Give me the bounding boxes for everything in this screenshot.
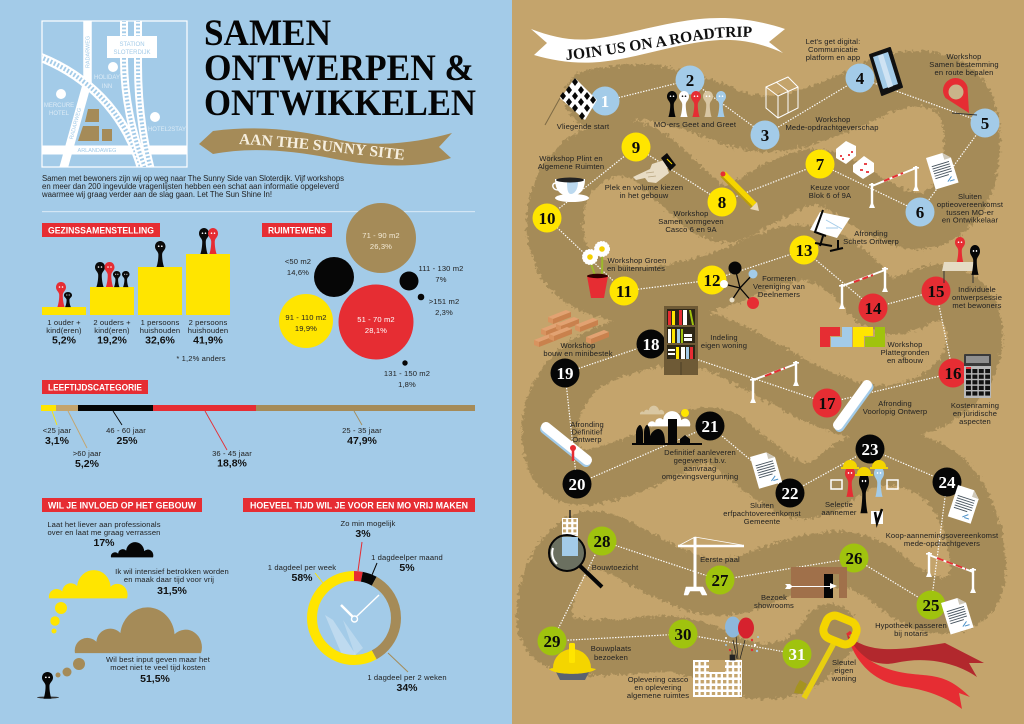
heading: ruimtewens <box>262 223 332 237</box>
route labels: Bouwplaats <box>591 644 631 653</box>
clouds: influence chart: en maak daar tijd voor vrij <box>124 575 214 584</box>
icon: workers with hard hats <box>831 460 898 524</box>
bubble chart: room sizes: 131 - 150 m2 <box>384 369 430 378</box>
banner: join us on a roadtrip <box>531 18 785 63</box>
map of Sloterdijk area: INN <box>102 84 112 90</box>
route labels: Afronding <box>854 229 888 238</box>
route stops 25 to 31: green: 31 <box>788 645 806 664</box>
icon: pawns <box>667 91 726 117</box>
bar chart: household composition: 5,2% <box>52 334 77 346</box>
route stops 25 to 31: green: 28 <box>594 532 610 551</box>
icon: bricks <box>534 310 609 347</box>
map of Sloterdijk area: STATION <box>119 42 145 48</box>
icon: hard hat <box>549 643 596 680</box>
route labels: Let's get digital: <box>806 37 860 46</box>
route labels: aannemer <box>821 508 857 517</box>
intro text: waarmee wij graag verder aan de slag gaan. Let The Sun Shine In! <box>41 190 272 199</box>
title <box>204 13 476 124</box>
route labels: Sluiten <box>750 501 774 510</box>
route stops 7 to 13: yellow: 13 <box>796 241 812 260</box>
icon: contract 24 <box>948 485 981 524</box>
bar chart: household composition: kind(eren) <box>46 326 82 335</box>
route stops 14 to 17: red: 17 <box>818 394 836 413</box>
route stops 18 to 24: black: 22 <box>782 484 798 503</box>
route labels: erfpachtovereenkomst <box>723 509 802 518</box>
icon: key with red ribbons <box>794 613 984 709</box>
route stops 25 to 31: green: 30 <box>674 625 692 644</box>
route labels: platform en app <box>806 53 860 62</box>
route labels: Bouwtoezicht <box>592 563 639 572</box>
route stops 14 to 17: red: 15 <box>928 282 944 301</box>
route labels: in het gebouw <box>620 191 669 200</box>
icon: coffee cup <box>553 178 589 202</box>
icon: wire house <box>766 77 798 118</box>
stacked bar: age categories <box>41 405 475 470</box>
bubble chart: room sizes: 14,6% <box>287 268 309 277</box>
ribbon: aan the sunny site: AAN THE SUNNY SITE <box>239 134 404 160</box>
route labels: omgevingsvergunning <box>662 472 738 481</box>
route labels: Gemeente <box>744 517 780 526</box>
route stops 7 to 13: yellow: 12 <box>704 271 720 290</box>
clouds: influence chart: 31,5% <box>157 585 188 597</box>
stacked bar: age categories: 25% <box>116 435 138 447</box>
route stops 18 to 24: black: 21 <box>702 417 718 436</box>
bubble chart: room sizes: <50 m2 <box>285 257 311 266</box>
map of Sloterdijk area: ARLANDAWEG <box>78 148 116 154</box>
route stops 1 to 6: blue: 2 <box>686 71 694 90</box>
route labels: ontwerpsessie <box>952 293 1002 302</box>
route stops 18 to 24: black: 24 <box>938 473 956 492</box>
stacked bar: age categories: 47,9% <box>347 435 378 447</box>
route labels: en buitenruimtes <box>607 264 665 273</box>
clouds: influence chart <box>37 520 229 699</box>
banner: join us on a roadtrip: JOIN US ON A ROADTRIP <box>566 26 752 60</box>
stacked bar: age categories: 3,1% <box>45 435 70 447</box>
icon: dice <box>836 141 874 179</box>
route stops 7 to 13: yellow <box>532 132 834 306</box>
bar chart: household composition: 32,6% <box>145 334 176 346</box>
map of Sloterdijk area: MERCURE <box>44 103 74 109</box>
route labels: optieovereenkomst <box>937 200 1004 209</box>
route labels: Blok 6 of 9A <box>809 191 852 200</box>
route stops 25 to 31: green: 25 <box>922 596 940 615</box>
route labels: Bezoek <box>761 593 787 602</box>
route labels: en afbouw <box>887 356 923 365</box>
route stops 18 to 24: black: 18 <box>642 335 660 354</box>
route labels: gegevens t.b.v. <box>674 456 726 465</box>
icon: table with pawns <box>942 237 980 283</box>
route stops 1 to 6: blue: 4 <box>856 69 865 88</box>
route labels: Casco 6 en 9A <box>665 225 717 234</box>
icon: magnifier on building <box>549 510 602 587</box>
bubble chart: room sizes <box>279 203 464 389</box>
icon: contract 6 <box>926 151 959 190</box>
route stops 25 to 31: green: 27 <box>712 571 729 590</box>
route labels: Plattegronden <box>881 348 929 357</box>
route labels: Kostenraming <box>951 401 999 410</box>
icon: checkered flag <box>545 78 597 125</box>
route labels: en route bepalen <box>935 68 993 77</box>
bar chart: household composition: huishouden <box>188 326 228 335</box>
clock donut chart: time <box>268 519 447 694</box>
clock donut chart: time: Zo min mogelijk <box>341 519 396 528</box>
route labels: Oplevering casco <box>628 675 688 684</box>
icon: crane <box>678 537 744 595</box>
clouds: influence chart: moet niet te veel tijd kosten <box>110 663 206 672</box>
route labels: Workshop <box>815 115 851 124</box>
map of Sloterdijk area: HOTEL <box>49 111 70 117</box>
route labels: tussen MO-er <box>946 208 994 217</box>
clouds: influence chart: 17% <box>93 537 115 549</box>
route labels: MO-ers Geet and Greet <box>654 120 737 129</box>
map of Sloterdijk area <box>40 20 190 170</box>
bar chart: household composition: huishouden <box>140 326 180 335</box>
route labels: Samen bestemming <box>929 60 999 69</box>
route labels: Sleutel <box>832 658 856 667</box>
route labels: Vereniging van <box>753 282 805 291</box>
clock donut chart: time: 1 dagdeel per 2 weken <box>367 673 447 682</box>
route labels: Formeren <box>762 274 796 283</box>
route labels: Deelnemers <box>758 290 800 299</box>
route labels: Plek en volume kiezen <box>605 183 683 192</box>
map of Sloterdijk area: HOTEL2STAY <box>148 127 186 133</box>
route labels: eigen <box>834 666 854 675</box>
icon: gate 3 <box>750 361 799 403</box>
route stops 7 to 13: yellow: 7 <box>816 155 825 174</box>
icon: flowers in pot <box>582 242 610 298</box>
bar chart: household composition: 19,2% <box>97 334 128 346</box>
icon: showroom door <box>785 567 847 598</box>
clouds: influence chart: Ik wil intensief betrokken worden <box>115 567 229 576</box>
intro text: Samen met bewoners zijn wij op weg naar The Sunny Side van Sloterdijk. Vijf workshops <box>42 174 344 183</box>
bubble chart: room sizes: 28,1% <box>365 326 387 335</box>
route stops 1 to 6: blue: 1 <box>601 92 609 111</box>
route stops 18 to 24: black: 20 <box>568 475 586 494</box>
winding road <box>544 79 978 671</box>
route stops 18 to 24: black <box>550 330 962 508</box>
heading: hoeveel tijd: HOEVEEL TIJD WIL JE VOOR EEN MO VRIJ MAKEN <box>250 500 468 510</box>
stacked bar: age categories: >60 jaar <box>73 449 102 458</box>
route labels: Schets Ontwerp <box>843 237 899 246</box>
left panel background <box>0 0 512 724</box>
route labels <box>538 37 1004 700</box>
icon: skyline <box>632 406 702 445</box>
icon: network nodes <box>720 262 759 309</box>
route stops 1 to 6: blue: 5 <box>981 114 989 133</box>
icon: scroll 20 with seal <box>545 427 587 462</box>
map of Sloterdijk area: RADARWEG <box>69 107 83 140</box>
route labels: Selectie <box>825 500 853 509</box>
icon: pointing hand <box>633 153 676 183</box>
bar chart: household composition: 2 persoons <box>189 318 227 327</box>
route labels: met bewoners <box>952 301 1002 310</box>
route labels: Eerste paal <box>700 555 740 564</box>
route labels: Individuele <box>958 285 996 294</box>
ribbon: aan the sunny site <box>199 128 452 166</box>
heading: gezinssamenstelling <box>42 223 160 237</box>
bar chart: household composition: 2 ouders + <box>93 318 131 327</box>
stacked bar: age categories: 5,2% <box>75 458 100 470</box>
route labels: showrooms <box>754 601 794 610</box>
icon: gate 1 <box>869 166 919 208</box>
bubble chart: room sizes: 2,3% <box>435 308 453 317</box>
icon: contract 25 <box>941 596 974 635</box>
icon: scroll 17 <box>838 385 868 427</box>
route labels: en oplevering <box>634 683 682 692</box>
title: ONTWIKKELEN <box>204 83 476 124</box>
route labels: bezoeken <box>594 653 628 662</box>
route stops 1 to 6: blue: 3 <box>761 126 769 145</box>
icon: balloons and building <box>693 616 759 697</box>
route stops 1 to 6: blue <box>590 64 1000 226</box>
stacked bar: age categories: 25 - 35 jaar <box>342 426 382 435</box>
route stops 18 to 24: black: 23 <box>862 440 878 459</box>
route labels: Workshop Plint en <box>539 154 603 163</box>
map of Sloterdijk area: HOLIDAY <box>94 75 120 81</box>
stacked bar: age categories: <25 jaar <box>43 426 72 435</box>
bubble chart: room sizes: >151 m2 <box>429 297 459 306</box>
icon: location pin <box>943 78 977 115</box>
route stops 7 to 13: yellow: 9 <box>632 138 640 157</box>
icon: gate 4 <box>926 552 976 593</box>
clouds: influence chart: Wil best input geven maar het <box>106 655 211 664</box>
route labels: Koop-aannemingsovereenkomst <box>886 531 999 540</box>
route labels: Workshop Groen <box>608 256 666 265</box>
route stops 7 to 13: yellow: 8 <box>718 193 726 212</box>
route labels: en Ontwikkelaar <box>942 216 998 224</box>
route labels: Sluiten <box>958 192 982 201</box>
route labels: Afronding <box>570 420 604 429</box>
heading: leeftijdscategorie: LEEFTIJDSCATEGORIE <box>48 382 142 392</box>
route stops 7 to 13: yellow: 11 <box>616 282 632 301</box>
bar chart: household composition: * 1,2% anders <box>176 354 226 363</box>
route stops 14 to 17: red <box>812 276 968 418</box>
bubble chart: room sizes: 71 - 90 m2 <box>362 231 400 240</box>
heading: wil je invloed: WIL JE INVLOED OP HET GEBOUW <box>48 500 196 510</box>
icon: floor plan blocks <box>820 327 885 347</box>
route labels: woning <box>831 674 856 683</box>
heading: gezinssamenstelling: GEZINSSAMENSTELLING <box>48 226 154 236</box>
icon: calculator <box>964 354 991 398</box>
route labels: Algemene Ruimten <box>538 162 604 171</box>
heading: hoeveel tijd <box>243 498 475 512</box>
route labels: eigen woning <box>701 341 747 350</box>
stacked bar: age categories: 18,8% <box>217 458 248 470</box>
route labels: Workshop <box>946 52 982 61</box>
intro text <box>41 174 344 199</box>
clouds: influence chart: 51,5% <box>140 673 171 685</box>
route labels: Communicatie <box>808 45 858 54</box>
clock donut chart: time: 1 dagdeel per week <box>268 563 336 572</box>
bar chart: household composition <box>42 228 230 363</box>
bubble chart: room sizes: 91 - 110 m2 <box>285 313 327 322</box>
bubble chart: room sizes: 51 - 70 m2 <box>357 315 395 324</box>
icon: contract 22 <box>750 450 782 489</box>
route stops 14 to 17: red: 14 <box>864 299 882 318</box>
route labels: bouw en minibestek <box>543 349 613 358</box>
icon: pencil <box>720 172 759 211</box>
route stops 25 to 31: green: 26 <box>846 549 862 568</box>
clouds: influence chart: Laat het liever aan professionals <box>47 520 161 529</box>
route stops 7 to 13: yellow: 10 <box>538 209 556 228</box>
route labels: en juridische <box>953 409 997 418</box>
route labels: Workshop <box>887 340 923 349</box>
route labels: mede-opdrachtgevers <box>904 539 980 548</box>
map of Sloterdijk area: SLOTERDIJK <box>113 50 151 56</box>
icon: drawing board <box>810 210 850 251</box>
route labels: aspecten <box>959 417 991 426</box>
bar chart: household composition: 1 ouder + <box>47 318 81 327</box>
route labels: Workshop <box>673 209 709 218</box>
icon: bookshelf <box>664 306 698 375</box>
right panel background <box>512 0 1024 724</box>
clouds: influence chart: over en laat me graag verrassen <box>47 528 161 537</box>
route labels: Vliegende start <box>557 122 610 131</box>
bubble chart: room sizes: 26,3% <box>370 242 392 251</box>
bubble chart: room sizes: 19,9% <box>295 324 317 333</box>
route labels: Workshop <box>560 341 596 350</box>
dotted route line <box>547 78 985 654</box>
route labels: algemene ruimtes <box>627 691 689 700</box>
stacked bar: age categories: 46 - 60 jaar <box>106 426 146 435</box>
route stops 25 to 31: green: 29 <box>544 632 560 651</box>
bubble chart: room sizes: 7% <box>435 275 447 284</box>
route labels: Definitief <box>572 428 603 436</box>
route labels: Hypotheek passeren <box>875 621 947 630</box>
clock donut chart: time: 58% <box>291 572 313 584</box>
route stops 18 to 24: black: 19 <box>556 364 574 383</box>
icon: gate 2 <box>839 267 888 309</box>
route labels: Keuze voor <box>810 183 850 192</box>
route labels: Mede-opdrachtgeverschap <box>785 123 879 132</box>
heading: ruimtewens: RUIMTEWENS <box>268 226 326 236</box>
route stops 25 to 31: green <box>538 526 946 668</box>
title: SAMEN <box>204 13 331 54</box>
clock donut chart: time: 5% <box>399 562 415 574</box>
bubble chart: room sizes: 111 - 130 m2 <box>418 264 464 273</box>
route labels: Definitief aanleveren <box>664 448 736 457</box>
stacked bar: age categories: 36 - 45 jaar <box>212 449 252 458</box>
title: ONTWERPEN & <box>204 48 474 89</box>
heading: leeftijdscategorie <box>42 380 148 394</box>
intro text: en meer dan 200 ingevulde vragenlijsten hebben een schat aan informatie opgeleverd <box>42 182 339 191</box>
clock donut chart: time: 3% <box>355 528 371 540</box>
route labels: Indeling <box>710 333 738 342</box>
map of Sloterdijk area: RADARWEG <box>86 36 92 68</box>
bubble chart: room sizes: 1,8% <box>398 380 416 389</box>
bar chart: household composition: 1 persoons <box>141 318 179 327</box>
route labels: Samen vormgeven <box>658 217 724 226</box>
clock donut chart: time: 1 dagdeelper maand <box>371 553 443 562</box>
icon: smartphone <box>870 48 902 95</box>
route labels: Afronding <box>878 399 912 408</box>
route labels: aanvraag <box>684 464 716 473</box>
bar chart: household composition: 41,9% <box>193 334 224 346</box>
clock donut chart: time: 34% <box>396 682 418 694</box>
route stops 14 to 17: red: 16 <box>944 364 962 383</box>
bar chart: household composition: kind(eren) <box>94 326 130 335</box>
route labels: Ontwerp <box>572 435 602 444</box>
route stops 1 to 6: blue: 6 <box>916 203 924 222</box>
heading: wil je invloed <box>42 498 202 512</box>
route labels: bij notaris <box>894 629 928 638</box>
route labels: Voorlopig Ontwerp <box>863 407 927 416</box>
